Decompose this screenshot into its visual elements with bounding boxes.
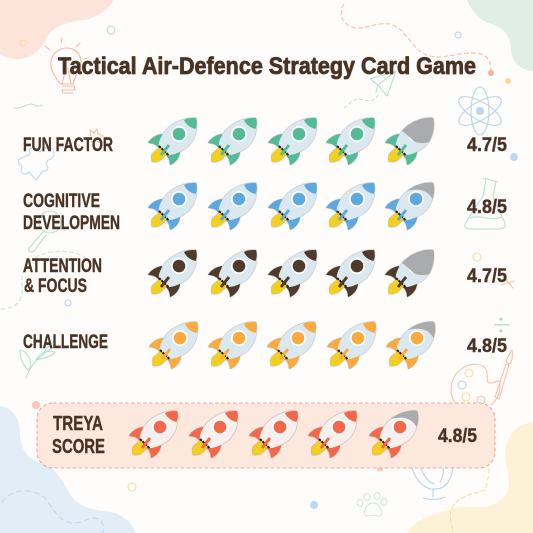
label: treya score: SCORE <box>52 436 105 458</box>
dashed path: teal <box>342 95 378 109</box>
score: treya score: 4.8/5 <box>438 426 477 447</box>
icon: paint palette <box>451 350 512 405</box>
dashed path: yellow <box>450 445 489 533</box>
icon: leaf branch <box>20 341 55 378</box>
score: cognitive development: 4.8/5 <box>467 197 507 218</box>
dot: blue bottom <box>310 501 318 509</box>
icon: globe <box>412 467 453 499</box>
row: challenge <box>23 322 507 369</box>
icon: puzzle piece <box>18 148 54 180</box>
icon: star <box>90 129 103 143</box>
label: cognitive development <box>23 191 120 234</box>
label: attention and focus: & FOCUS <box>24 276 87 297</box>
dashed path: blue <box>2 491 104 533</box>
blob: top-left peach <box>0 0 114 59</box>
dot: coral <box>488 70 494 76</box>
small circle: yellow top of score <box>473 253 481 261</box>
rocket rating: attention and focus <box>148 250 434 297</box>
dashed circle arc <box>1 251 90 309</box>
label: fun factor: FUN FACTOR <box>23 135 113 156</box>
rocket rating: fun factor <box>148 118 434 165</box>
blob: top-right green <box>467 0 533 71</box>
blob: bottom-left blue <box>0 406 136 533</box>
icon: paw print <box>357 492 387 516</box>
label: attention and focus: ATTENTION <box>23 256 102 277</box>
icon: flask <box>465 178 505 229</box>
wave: teal <box>14 104 42 108</box>
icon: atom <box>455 87 505 135</box>
icon: magnifier <box>29 211 61 252</box>
icon: divide sign <box>494 318 509 332</box>
label: attention and focus <box>23 256 102 297</box>
dot: yellow <box>505 78 511 84</box>
small circle: blue <box>455 32 461 38</box>
small circle: blue left <box>65 300 71 306</box>
small circle: yellow <box>20 40 26 46</box>
row: cognitive development <box>23 183 507 234</box>
icon: cross <box>501 278 514 288</box>
rocket rating: cognitive development <box>148 183 434 230</box>
row: attention and focus <box>23 250 507 297</box>
dashed path: top <box>341 4 491 70</box>
score: challenge: 4.8/5 <box>467 336 507 357</box>
atom nucleus <box>476 107 484 115</box>
small circle: yellow bottom <box>128 483 136 491</box>
dot: blue <box>510 153 518 161</box>
panel: treya score <box>37 403 495 468</box>
panel background <box>37 403 495 468</box>
dot: coral panel corner <box>32 401 40 409</box>
icon: light bulb <box>45 38 88 93</box>
dot: coral under panel <box>376 464 384 472</box>
blob: bottom-right yellow <box>407 422 533 533</box>
label: cognitive development: DEVELOPMEN <box>23 213 120 234</box>
icon: paper plane <box>370 71 396 96</box>
score: attention and focus: 4.7/5 <box>467 266 507 287</box>
label: cognitive development: COGNITIVE <box>23 191 100 212</box>
rocket rating: challenge <box>149 322 435 369</box>
label: challenge: CHALLENGE <box>23 332 108 353</box>
title: Tactical Air-Defence Strategy Card Game <box>58 53 476 80</box>
label: treya score: TREYA <box>53 413 103 435</box>
row: fun factor <box>23 118 507 165</box>
score: fun factor: 4.7/5 <box>467 135 507 156</box>
label: treya score <box>52 413 105 458</box>
rocket rating: treya score <box>129 411 418 458</box>
small circle: teal <box>107 26 115 34</box>
